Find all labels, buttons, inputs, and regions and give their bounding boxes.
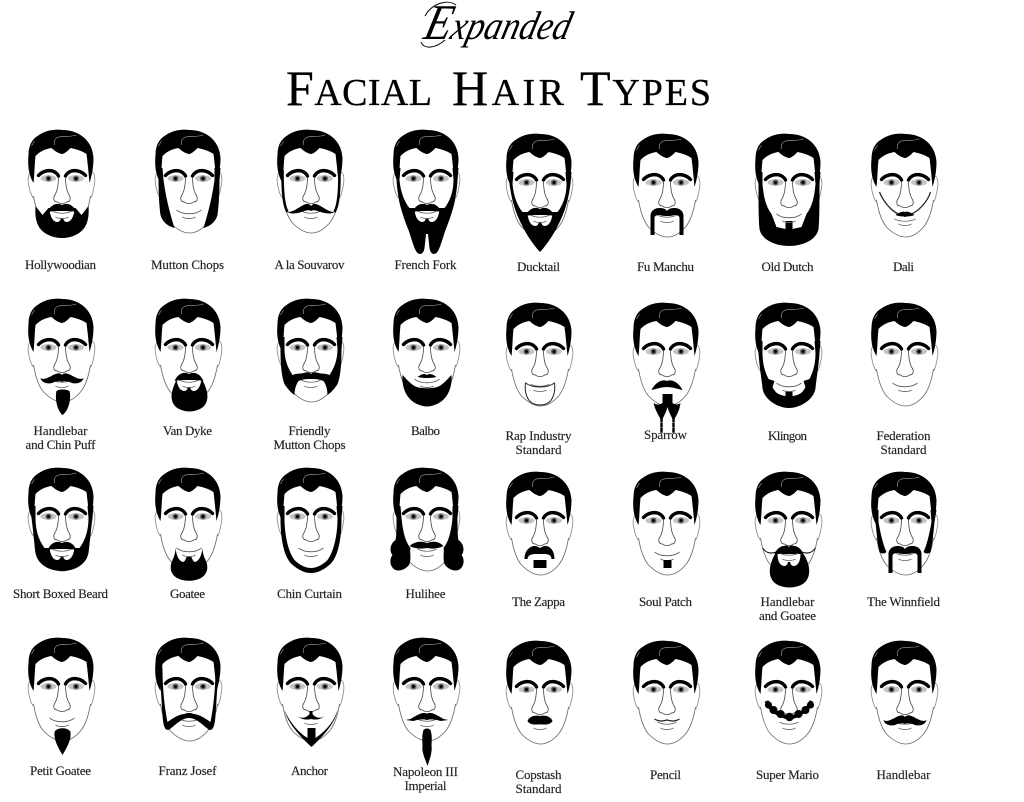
portrait: Ducktail [506,134,573,274]
label: Mutton Chops [151,257,224,272]
portrait: A la Souvarov [274,130,345,272]
sideburns [158,168,220,228]
portrait: Fu Manchu [633,134,700,274]
portrait: Anchor [277,638,344,778]
title: Facial Hair Types: HAIR [452,60,565,116]
chin puff [56,390,70,415]
portrait: Mutton Chops [151,130,224,272]
moustache [528,716,552,725]
beard [508,172,572,252]
label: Pencil [650,767,681,782]
label: Handlebar [34,423,88,438]
portrait: Goatee [155,468,222,601]
label: Fu Manchu [637,259,694,274]
label: Balbo [411,423,440,438]
label: Standard [516,781,562,796]
beard [172,374,207,412]
label: Van Dyke [163,423,212,438]
label: Franz Josef [158,763,217,778]
goatee [171,548,207,581]
moustache and chin patch [524,546,554,568]
portrait: The Winnfield [867,472,940,609]
portrait: Chin Curtain [277,468,344,601]
label: and Chin Puff [26,437,96,452]
beard [30,506,94,571]
chin curtain [280,506,342,573]
portrait: Short Boxed Beard [13,468,108,601]
label: Imperial [404,778,447,793]
portrait: French Fork [393,130,460,272]
beard [402,375,452,406]
beard [758,341,820,408]
portrait: Pencil [633,641,700,782]
portrait: Hollywoodian [25,130,96,272]
title: Facial Hair Types: TYPES [580,60,711,116]
label: Klingon [768,428,808,443]
title: Facial Hair Types [286,60,711,116]
portrait: Klingon [755,303,822,443]
label: Short Boxed Beard [13,586,108,601]
portrait: Petit Goatee [28,638,95,778]
anchor beard [284,710,338,747]
label: Ducktail [517,259,560,274]
sideburns [874,510,936,554]
moustache [765,701,814,721]
portrait: Handlebar and Goatee [755,472,822,623]
goatee [54,728,71,755]
label: Anchor [291,763,329,778]
label: Hollywoodian [25,257,96,272]
whiskers [160,668,218,730]
label: French Fork [394,257,457,272]
label: Sparrow [644,427,688,442]
portrait: Balbo [393,299,460,438]
portrait: Copstash Standard [506,641,573,796]
label: A la Souvarov [274,257,345,272]
label: Standard [880,442,927,457]
portrait: Soul Patch [633,472,700,609]
portrait: Rap Industry Standard [506,303,573,457]
portrait: Franz Josef [155,638,222,778]
portrait: Dali [871,134,938,274]
portrait: Federation Standard [871,303,938,457]
label: and Goatee [759,608,816,623]
portrait: Sparrow [633,303,700,442]
label: Napoleon III [393,764,458,779]
label: Friendly [288,423,331,438]
label: Petit Goatee [30,763,91,778]
curls and moustache [390,506,464,571]
label: Hulihee [406,586,446,601]
portrait: Napoleon III Imperial [393,638,460,793]
label: Dali [893,259,914,274]
portrait: Hulihee [390,468,464,601]
portrait: Handlebar [871,641,938,782]
label: Goatee [170,586,205,601]
chin strap [525,383,555,405]
label: Handlebar [876,767,931,782]
moustache and imperial [406,713,448,766]
soul patch [664,560,672,568]
pencil moustache [654,719,680,721]
portrait: Super Mario [755,641,822,782]
portrait: Handlebar and Chin Puff [26,299,96,452]
moustache [896,212,914,217]
beard [396,168,458,254]
portrait: Friendly Mutton Chops [274,299,346,452]
portrait: Old Dutch [755,134,822,274]
beard [35,206,89,238]
beard [770,546,809,588]
label: Rap Industry [506,428,572,443]
label: Copstash [516,767,562,782]
beard [758,172,820,246]
chops [280,337,342,395]
title: Facial Hair Types: FACIAL [286,60,432,116]
label: Handlebar [760,594,815,609]
label: Federation [876,428,931,443]
label: Super Mario [756,767,819,782]
label: Soul Patch [639,594,692,609]
label: The Winnfield [867,594,940,609]
moustache [288,204,334,214]
label: The Zappa [512,594,565,609]
portrait: Van Dyke [155,299,222,438]
label: Chin Curtain [277,586,342,601]
label: Standard [516,442,562,457]
moustache and braids [652,380,682,419]
label: Old Dutch [762,259,814,274]
portrait: The Zappa [506,472,573,609]
label: Mutton Chops [274,437,346,452]
